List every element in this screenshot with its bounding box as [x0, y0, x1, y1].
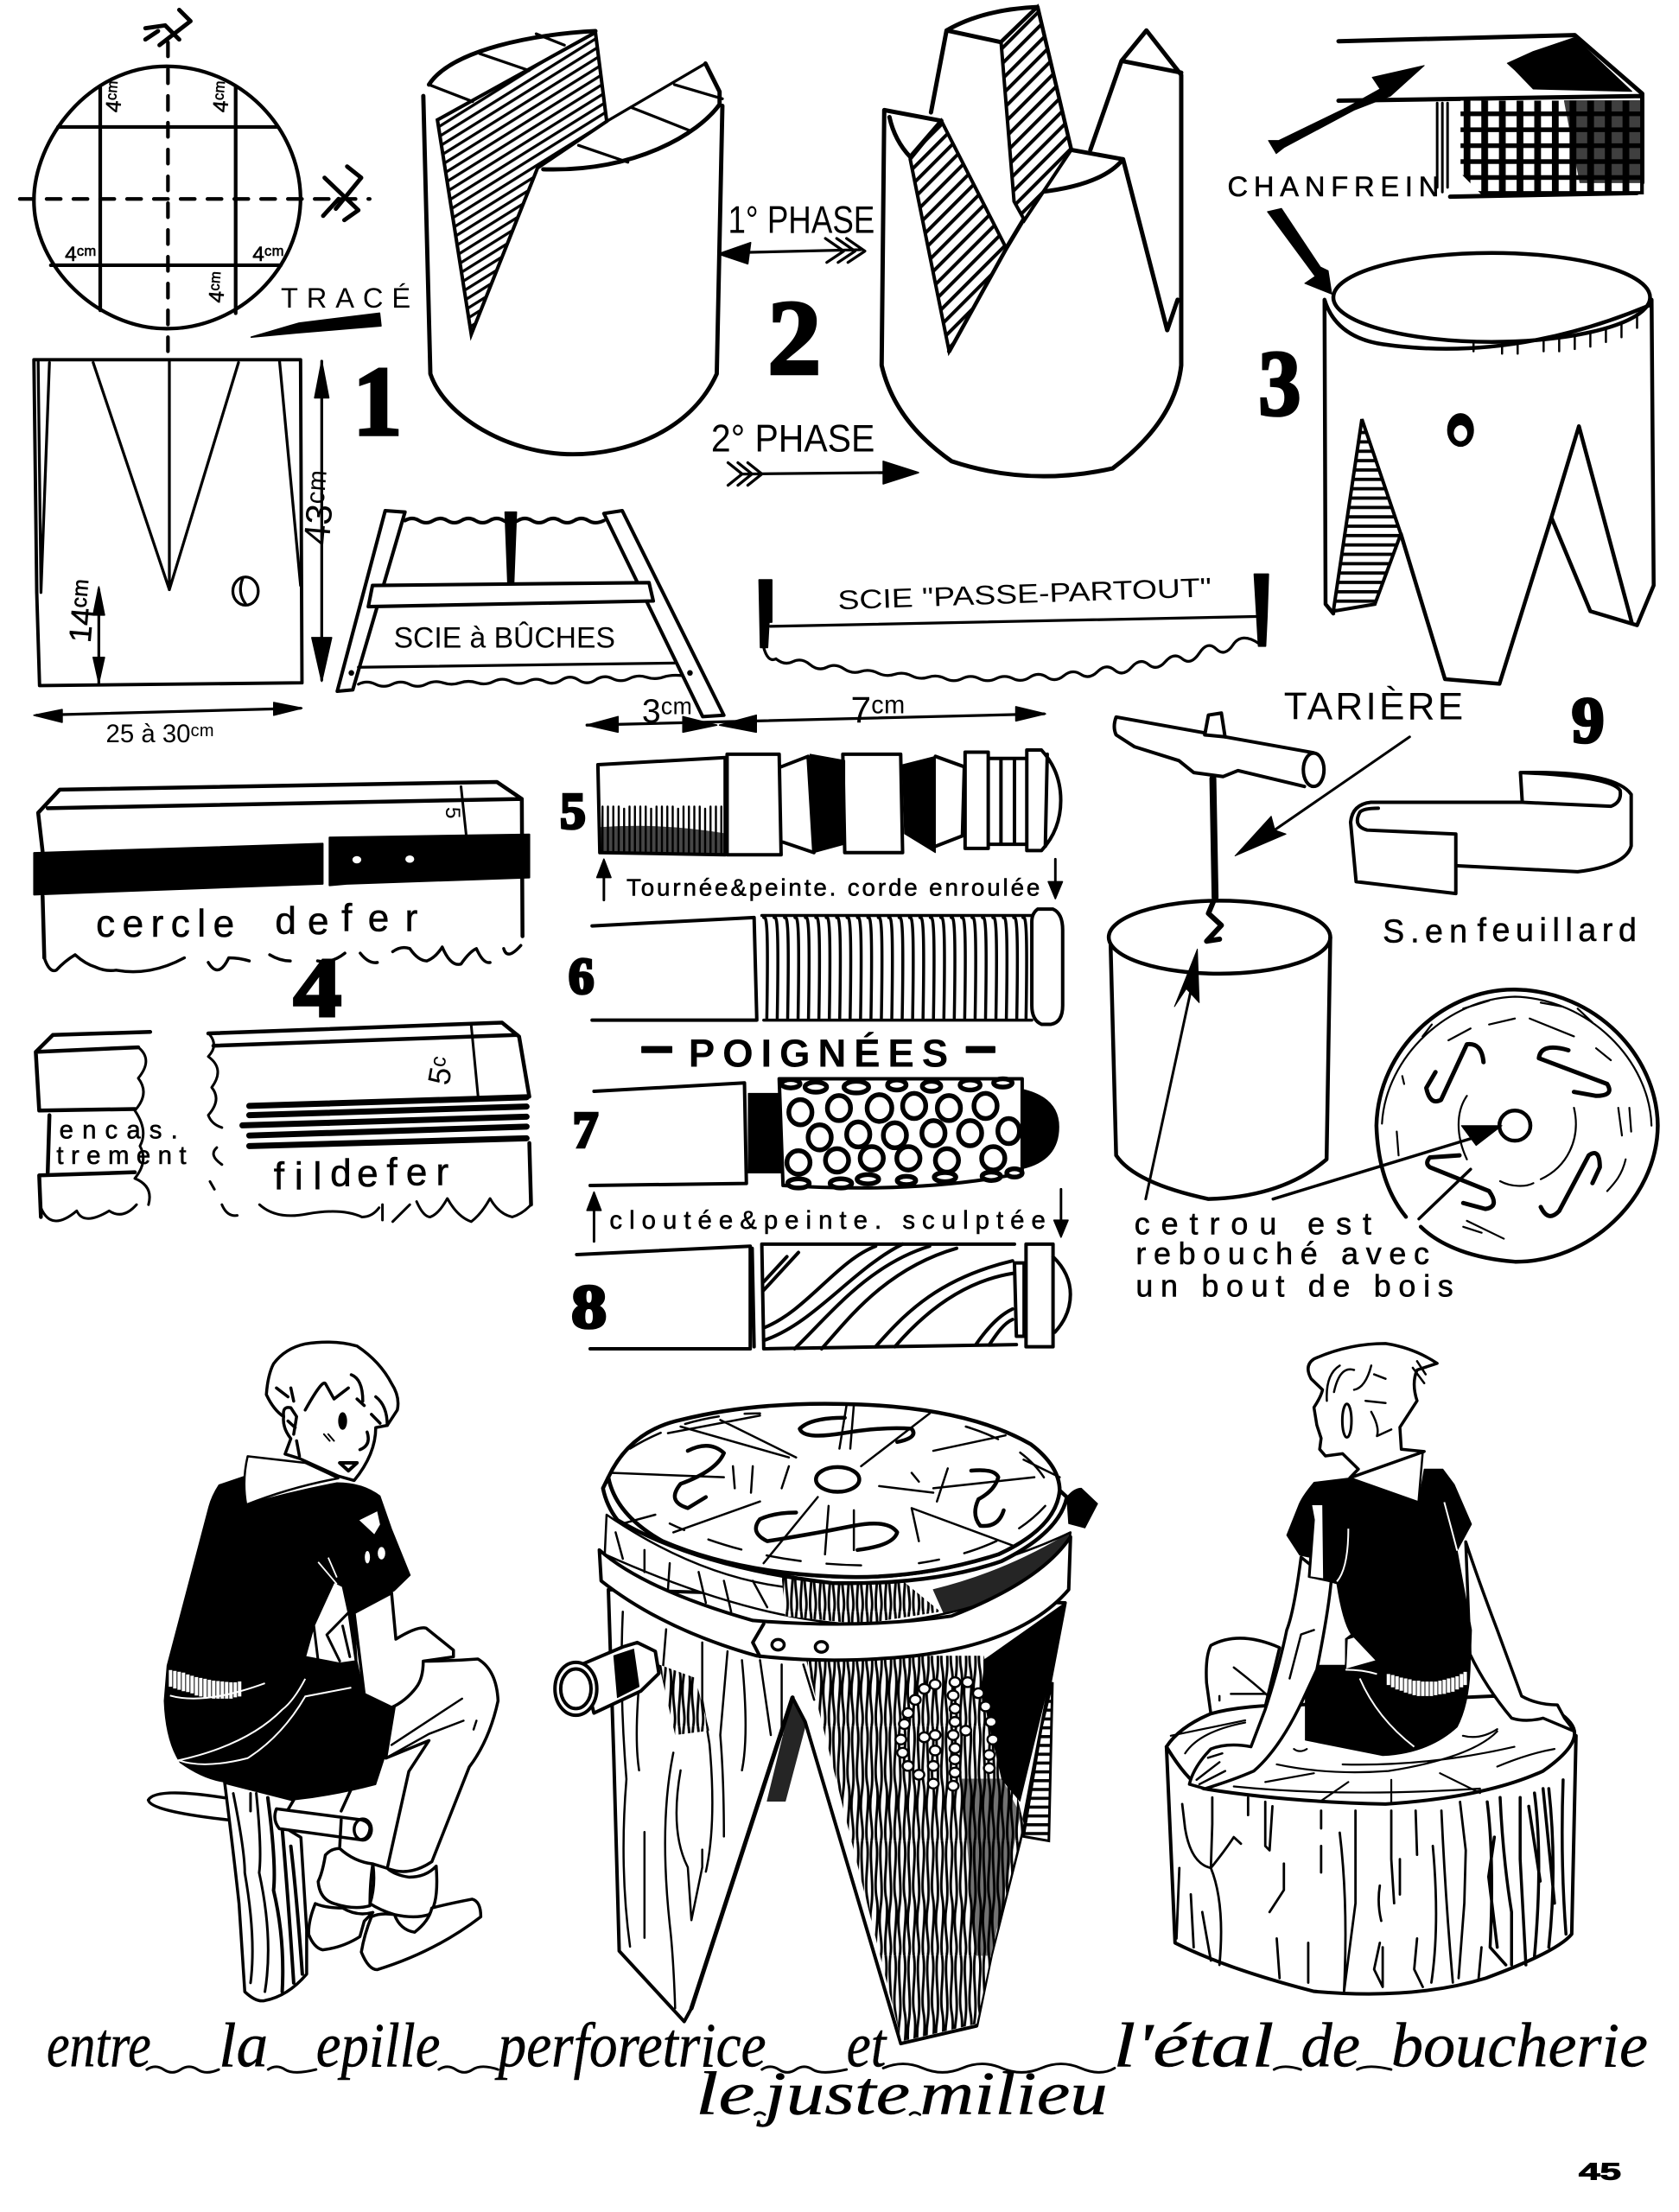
- wood grain under seat: [615, 1532, 1071, 1624]
- caption: handwritten line: la: [219, 2011, 268, 2080]
- disc with S-hooks: [1377, 989, 1657, 1262]
- wire block: [208, 1023, 531, 1222]
- caption: second handwritten line: le: [696, 2061, 755, 2127]
- dimension: 43 cm: 43ᶜᵐ: [296, 468, 343, 547]
- arrow: first phase: [718, 238, 865, 264]
- step number 3: 3: [1258, 333, 1301, 435]
- dimension: 25 to 30 cm: [34, 702, 302, 748]
- belt: [1389, 1672, 1466, 1696]
- belt: [170, 1670, 352, 1764]
- tool: two-man saw: [759, 572, 1269, 681]
- dimension: 25 to 30 cm: 25 à 30ᶜᵐ: [106, 720, 214, 748]
- label: tracé: TRACÉ: [281, 282, 410, 314]
- label: hole note: cetrou est: [1135, 1206, 1371, 1242]
- arrow: second phase: [728, 461, 919, 486]
- second phase cylinder: [881, 7, 1181, 476]
- label: studded, painted, sculpted: cloutée&peinte. sculptée: [609, 1206, 1046, 1235]
- dimension: 14 cm: [62, 578, 105, 683]
- dimension: 43 cm: [296, 361, 343, 682]
- caption: handwritten line: [47, 2011, 1648, 2080]
- heading: handles: POIGNÉES: [689, 1031, 948, 1075]
- legs and shoes: [308, 1659, 498, 1970]
- illustration: central stool: [555, 1404, 1097, 2044]
- label: mortise: encas.: [60, 1116, 178, 1145]
- head: [266, 1342, 398, 1480]
- gap behind arm: [1345, 1637, 1377, 1669]
- assembled stool drawing: [1325, 253, 1654, 683]
- panel 1: layout of the log: [20, 10, 410, 748]
- arm, left: [1189, 1557, 1331, 1789]
- far knee: [1206, 1638, 1280, 1718]
- caption: handwritten line: et: [847, 2011, 888, 2080]
- label: chanfrein: CHANFREIN: [1227, 170, 1439, 202]
- handle 6: rope wound: [592, 909, 1063, 1024]
- label: strap: S.: [1383, 913, 1420, 950]
- panel 2: cutting phases: [423, 7, 1181, 486]
- label: wire: fil: [274, 1155, 321, 1198]
- dimension 5 wire: 5ᶜ: [421, 1053, 461, 1088]
- label: wire: fer: [386, 1151, 448, 1193]
- stump: [1167, 1696, 1576, 1994]
- studded decoration: [895, 1677, 998, 1790]
- iron band: [600, 1537, 1071, 1660]
- auger and log: [1109, 713, 1330, 1199]
- label: strap: en: [1425, 913, 1467, 950]
- label: iron hoop: cercle: [96, 903, 234, 945]
- panel: handles: [560, 750, 1071, 1349]
- label: turned, painted, rope wound: Tournée&peinte. corde enroulée: [626, 874, 1040, 901]
- label: hole note: un bout de bois: [1135, 1268, 1453, 1303]
- measurements on the circle: 4ᶜᵐ: [102, 80, 128, 113]
- caption: second handwritten line: [696, 2061, 1108, 2127]
- gap under the sleeve: [305, 1582, 356, 1663]
- step number 1: 1: [353, 346, 402, 456]
- dimension: 14 cm: 14ᶜᵐ: [62, 578, 103, 644]
- chamfer detail block: [1339, 35, 1644, 197]
- label: wire: de: [330, 1153, 378, 1195]
- circle plan of the log: [20, 42, 370, 353]
- arrow: log centre: [1146, 949, 1199, 1199]
- measurements on the circle: 4ᶜᵐ: [65, 243, 96, 266]
- caption: handwritten line: de: [1301, 2011, 1360, 2080]
- caption: second handwritten line: juste: [756, 2061, 910, 2127]
- label: first phase: 1° PHASE: [728, 199, 874, 241]
- step number 4: 4: [294, 942, 341, 1035]
- handle 5: turned and painted: [598, 750, 1061, 855]
- panel: auger tool: [1109, 686, 1463, 1199]
- mortise block: [35, 1032, 150, 1221]
- dimensions: handle 3 cm and 7 cm: 7ᶜᵐ: [851, 690, 905, 730]
- stool post and peg: [149, 1783, 372, 2001]
- arrow: chamfer detail: [1269, 66, 1424, 154]
- shoulder tab: [1310, 1504, 1324, 1580]
- illustration: boy on the stool, left: [149, 1342, 498, 2001]
- label: mortise: trement: [56, 1141, 187, 1170]
- label: auger: TARIÈRE: [1284, 686, 1463, 728]
- label: strap: feuillard: [1477, 912, 1637, 948]
- head: [1308, 1344, 1437, 1478]
- arm, right: [1466, 1541, 1574, 1732]
- number 5: 5: [560, 783, 586, 839]
- arrow: chanfrein: [1268, 208, 1332, 294]
- arrow: tracé: [251, 313, 381, 337]
- measurements on the circle: 4ᶜᵐ: [209, 80, 235, 113]
- caption: handwritten line: boucherie: [1391, 2011, 1648, 2080]
- caption: handwritten line: entre: [47, 2011, 151, 2080]
- number 6: 6: [569, 948, 594, 1004]
- legs: [608, 1590, 1065, 2044]
- dimensions: handle 3 cm and 7 cm: 3ᶜᵐ: [642, 693, 692, 730]
- caption: handwritten line: l'étal: [1113, 2011, 1274, 2080]
- caption: handwritten line: epille: [316, 2011, 440, 2080]
- label: studded, painted, sculpted: [587, 1189, 1068, 1242]
- back peg: [1067, 1488, 1097, 1528]
- label: turned, painted, rope wound: [597, 859, 1062, 901]
- wood below the seat: [605, 1515, 1071, 1625]
- label: two-man saw: SCIE "PASSE-PARTOUT": [837, 572, 1212, 615]
- side peg: [555, 1643, 659, 1715]
- page number: 45: [1579, 2158, 1621, 2184]
- axis marks: [145, 10, 361, 220]
- arrow: auger: [1235, 737, 1409, 856]
- label: log saw: SCIE à BÛCHES: [394, 620, 615, 654]
- step number 9: 9: [1572, 685, 1604, 757]
- collar: [1350, 1452, 1423, 1503]
- panel 9: strap S-hook: [1135, 685, 1657, 1303]
- label: iron hoop: fer: [341, 898, 417, 940]
- number 8: 8: [571, 1272, 607, 1341]
- label: iron hoop: de: [275, 900, 328, 943]
- measurements on the circle: 4ᶜᵐ: [205, 270, 231, 304]
- number 7: 7: [573, 1102, 598, 1158]
- label: second phase: 2° PHASE: [711, 417, 874, 460]
- shirt badges: [359, 1511, 385, 1563]
- shirt and shorts: [164, 1476, 410, 1800]
- elevation drawing of the log: [34, 359, 302, 685]
- hoop block: [34, 782, 530, 972]
- arrows: hole: [1273, 1126, 1502, 1219]
- strap drawing: [1351, 772, 1631, 893]
- caption: second handwritten line: milieu: [920, 2061, 1108, 2127]
- measurements on the circle: 4ᶜᵐ: [252, 243, 284, 266]
- dimension 5: 5: [441, 807, 464, 818]
- panel 3: chamfered seat: [1227, 35, 1654, 683]
- handle 7: studded: [590, 1078, 1059, 1188]
- first phase cylinder: [423, 31, 722, 454]
- handle 8: sculpted: [576, 1244, 1071, 1349]
- measurements on the circle: [65, 80, 284, 304]
- collar: [245, 1456, 339, 1504]
- caption: handwritten line: perforetrice: [494, 2011, 766, 2080]
- step number 2: 2: [767, 278, 821, 397]
- tool: log saw: [337, 511, 724, 716]
- seat top: [603, 1404, 1067, 1583]
- panel 4: iron hoops: [34, 782, 531, 1222]
- illustration: boy on the stump, right: [1167, 1344, 1576, 1994]
- band clasp: [753, 1624, 828, 1656]
- label: hole note: rebouché avec: [1135, 1236, 1429, 1271]
- arm and hand: [354, 1592, 454, 1707]
- shirt creases: [1337, 1503, 1457, 1747]
- dimensions: handle 3 cm and 7 cm: [587, 690, 1046, 732]
- shirt and shorts: [1287, 1469, 1472, 1756]
